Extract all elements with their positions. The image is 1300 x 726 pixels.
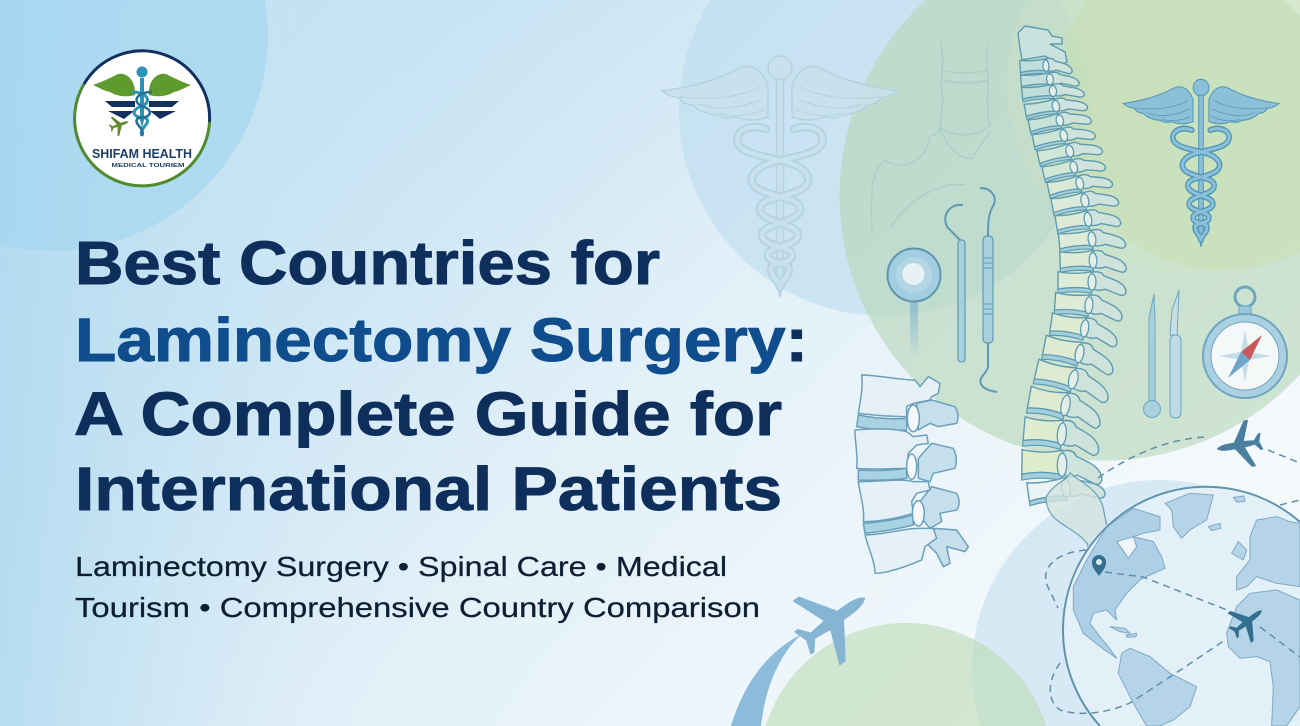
decorative circle: bottom green bbox=[766, 623, 1046, 726]
title: Best Countries for bbox=[75, 229, 660, 297]
icon: double probe bbox=[980, 188, 997, 392]
title bbox=[74, 229, 808, 523]
icon: top plane bbox=[1213, 418, 1266, 472]
lumbar vertebrae illustration bbox=[855, 375, 968, 573]
icon: mirror tool bbox=[888, 248, 940, 360]
decorative circle: caduceus backdrop bbox=[679, 0, 1091, 316]
icon: globe plane bbox=[1221, 595, 1274, 648]
icon: hook probe bbox=[945, 205, 965, 362]
decorative circle: globe backdrop bbox=[972, 480, 1300, 726]
globe bbox=[1062, 486, 1300, 726]
subtitle: Tourism • Comprehensive Country Comparison bbox=[75, 592, 760, 623]
title: International Patients bbox=[75, 455, 782, 523]
title: A Complete Guide for bbox=[74, 380, 782, 448]
icon: location pin bbox=[1092, 555, 1106, 576]
icon: curette bbox=[1170, 290, 1181, 418]
icon: large airplane with trail bbox=[731, 565, 889, 726]
decorative circle: top right pale green bbox=[1007, 0, 1300, 273]
icon: compass bbox=[1203, 287, 1287, 398]
logo: Shifam Health bbox=[75, 51, 210, 186]
logo: Shifam Health: MEDICAL TOURIEM bbox=[112, 163, 185, 169]
decorative circle: top left bbox=[0, 0, 268, 251]
dashed flight routes bbox=[1046, 437, 1300, 713]
title: Laminectomy Surgery : bbox=[75, 306, 808, 374]
faint bone outline bbox=[871, 42, 990, 232]
subtitle: Laminectomy Surgery • Spinal Care • Medical bbox=[75, 551, 727, 582]
icon: faint caduceus bbox=[662, 56, 898, 297]
decorative circle: top right green bbox=[1055, 0, 1300, 270]
spine illustration bbox=[1018, 26, 1126, 580]
logo: Shifam Health: SHIFAM HEALTH bbox=[92, 147, 192, 161]
subtitle bbox=[75, 551, 760, 623]
decorative circle: large green bbox=[840, 0, 1300, 460]
icon: scalpel bbox=[1144, 294, 1160, 418]
icon: blue caduceus bbox=[1123, 79, 1279, 247]
